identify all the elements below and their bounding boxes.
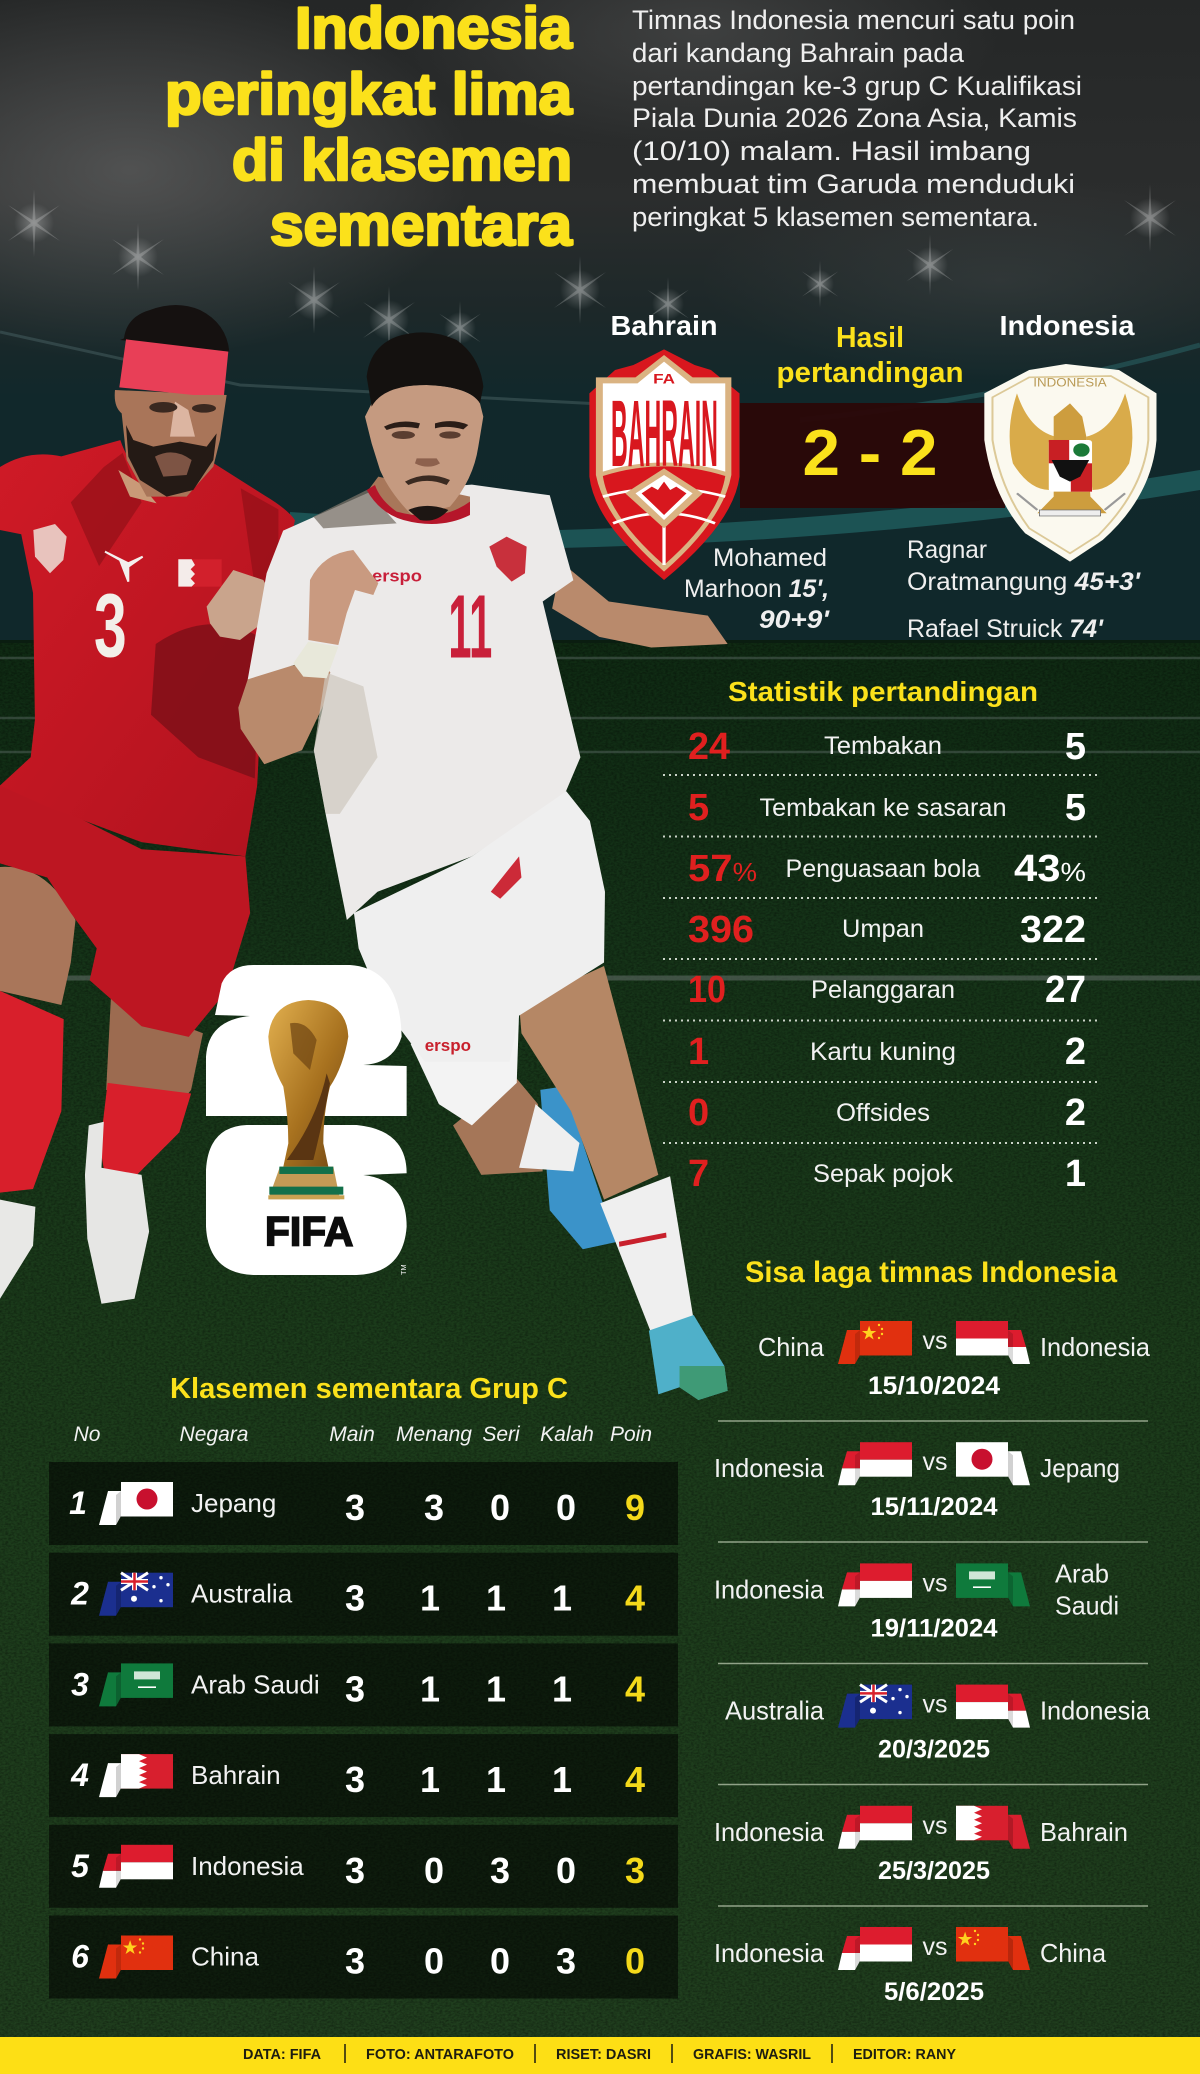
player in white: 11 [448,577,492,677]
match: Australia vs Indonesia: 20/3/2025 [878,1736,990,1764]
scorers: Bahrain: Marhoon 15', [684,575,829,603]
stat row: corners: 1 [1065,1153,1086,1195]
table header [74,1423,652,1446]
player in white: erspo [372,567,422,586]
row 3: Arab Saudi: 1 [486,1668,506,1709]
heading: match result: Hasil [836,322,904,354]
row 4: Bahrain: 1 [552,1759,572,1800]
footer credits bar: DATA: FIFA [243,2046,321,2063]
intro text block [632,5,1082,232]
match: Indonesia vs Bahrain: Bahrain [1040,1817,1128,1847]
match: China vs Indonesia: vs [922,1327,948,1355]
team name: Bahrain: Bahrain [610,310,718,341]
match result panel [589,310,1156,643]
footer credits bar: EDITOR: RANY [853,2046,956,2063]
row 6: China: 0 [424,1940,444,1982]
stat row: shots: Tembakan [824,732,942,760]
stat row: shots: 24 [688,726,730,768]
heading: standings: Klasemen sementara Grup C [170,1373,568,1405]
crest: Bahrain FA [589,349,740,580]
row 3: Arab Saudi: 3 [345,1668,365,1709]
footer credits bar: FOTO: ANTARAFOTO [366,2046,514,2063]
row 1: Jepang: 0 [556,1487,576,1528]
match: Indonesia vs Bahrain: vs [922,1812,948,1840]
row 3: Arab Saudi: Arab Saudi [191,1669,320,1699]
title [165,0,573,258]
match: Indonesia vs Jepang: Jepang [1040,1453,1120,1483]
match: Australia vs Indonesia: vs [922,1691,948,1719]
stat row: yellow cards: 1 [688,1031,709,1073]
row 4: Bahrain [49,1734,678,1817]
row 4: Bahrain: 3 [345,1759,365,1800]
intro text block: (10/10) malam. Hasil imbang [632,136,1031,166]
scorers: Indonesia: Rafael Struick 74' [907,615,1104,643]
scorers: Indonesia: Ragnar [907,536,987,564]
heading: remaining matches: Sisa laga timnas Indonesia [745,1256,1117,1289]
row 4: Bahrain: 4 [625,1759,645,1800]
row 4: Bahrain: Bahrain [191,1760,281,1790]
row 5: Indonesia: 3 [490,1850,510,1891]
row 1: Jepang: 9 [625,1487,645,1528]
row 2: Australia: 1 [552,1578,572,1619]
table header: No [74,1423,101,1446]
row 6: China: 3 [345,1940,365,1982]
scorers: Indonesia [907,536,1141,643]
table header: Poin [610,1423,652,1446]
row 1: Jepang: 3 [424,1487,444,1528]
row 4: Bahrain: 4 [70,1757,89,1793]
match: Indonesia vs Jepang: Indonesia [714,1453,825,1483]
stat row: passes: 396 [688,909,754,951]
row 2: Australia: Australia [191,1579,293,1609]
stat row: shots [688,726,1086,768]
row 6: China: 6 [71,1938,89,1974]
match: Indonesia vs Arab Saudi: vs [922,1569,948,1597]
stat row: yellow cards: 2 [1065,1031,1086,1073]
match: Indonesia vs Bahrain: 25/3/2025 [878,1857,990,1885]
table header: Menang [396,1423,472,1446]
stat row: offsides: Offsides [836,1099,930,1127]
intro text block: peringkat 5 klasemen sementara. [632,202,1039,232]
table header: Kalah [540,1423,594,1446]
stat row: fouls: Pelanggaran [811,976,955,1004]
match: Indonesia vs Bahrain [714,1806,1128,1885]
row 6: China: 3 [556,1940,576,1982]
row 1: Jepang: 1 [69,1485,87,1521]
stat row: corners: 7 [688,1153,709,1195]
row 1: Jepang: 3 [345,1487,365,1528]
row 2: Australia: 3 [345,1578,365,1619]
match: Australia vs Indonesia: Australia [725,1696,825,1726]
table header: Negara [180,1423,248,1446]
row 3: Arab Saudi [49,1643,678,1726]
row 5: Indonesia: 0 [424,1850,444,1891]
match: Indonesia vs China: 5/6/2025 [884,1978,984,2006]
match: Australia vs Indonesia: Indonesia [1040,1696,1151,1726]
stat row: passes [688,909,1086,951]
scorers: Bahrain: Mohamed [713,544,827,572]
row 5: Indonesia: 5 [71,1848,90,1884]
player in red: 3 [94,577,127,677]
match: China vs Indonesia: 15/10/2024 [868,1372,1000,1400]
row 6: China: China [191,1942,259,1972]
row 3: Arab Saudi: 1 [420,1668,440,1709]
panel: remaining Indonesia matches [714,1256,1151,2006]
stat row: fouls [688,969,1086,1011]
player in red [0,305,295,1304]
row 5: Indonesia [49,1825,678,1908]
row 6: China: 0 [490,1940,510,1982]
footer credits bar: RISET: DASRI [556,2046,651,2063]
match: Indonesia vs China [714,1927,1107,2006]
stat row: possession [688,848,1086,890]
row 1: Jepang [49,1462,678,1545]
row 3: Arab Saudi: 3 [71,1666,89,1702]
title: di klasemen [232,128,572,193]
row 2: Australia: 1 [420,1578,440,1619]
row 1: Jepang: Jepang [191,1488,276,1518]
match: Indonesia vs Arab Saudi [714,1558,1119,1642]
match: Indonesia vs Arab Saudi: Arab [1055,1558,1109,1588]
stat row: passes: Umpan [842,915,924,943]
row 3: Arab Saudi: 4 [625,1668,645,1709]
intro text block: pertandingan ke-3 grup C Kualifikasi [632,71,1082,101]
match: China vs Indonesia [758,1321,1151,1400]
intro text block: membuat tim Garuda menduduki [632,169,1075,199]
stat row: offsides [688,1092,1086,1134]
match: Indonesia vs Jepang: 15/11/2024 [870,1493,998,1521]
row 4: Bahrain: 1 [420,1759,440,1800]
title: sementara [270,193,573,258]
player in white: erspo [425,1037,471,1056]
footer credits bar [0,2037,1200,2074]
row 6: China [49,1916,678,1998]
crest: Indonesia [984,364,1156,562]
row 2: Australia: 4 [625,1578,645,1619]
stat row: shots on target: 5 [688,787,709,829]
crest: Indonesia: INDONESIA [1033,376,1107,389]
photo: two football players [0,305,728,1400]
stat row: shots on target: 5 [1065,787,1086,829]
row 4: Bahrain: 1 [486,1759,506,1800]
row 2: Australia [49,1553,678,1636]
logo: FIFA World Cup 2026: TM [399,1264,408,1275]
row 6: China: 0 [625,1940,645,1982]
row 1: Jepang: 0 [490,1487,510,1528]
row 5: Indonesia: Indonesia [191,1851,304,1881]
match: Indonesia vs China: China [1040,1938,1107,1968]
title: peringkat lima [165,62,573,127]
stat row: possession: 57% [688,848,757,890]
row 5: Indonesia: 3 [345,1850,365,1891]
stat row: corners [688,1153,1086,1195]
match: Indonesia vs Arab Saudi: Indonesia [714,1574,825,1604]
stat row: possession: 43% [1014,848,1086,890]
heading: match result [776,322,964,389]
crest: Bahrain FA: FA [653,372,675,387]
icon: World Cup trophy [268,1000,348,1199]
table header: Seri [482,1423,521,1446]
stat row: corners: Sepak pojok [813,1160,953,1188]
match: Indonesia vs Jepang [714,1442,1120,1521]
match: China vs Indonesia: Indonesia [1040,1332,1151,1362]
heading: match result: pertandingan [776,357,964,389]
row 2: Australia: 1 [486,1578,506,1619]
stat row: possession: Penguasaan bola [786,855,981,883]
player in white [238,332,728,1400]
scorers: Bahrain: 90+9' [759,606,830,634]
score band [740,403,1005,508]
stat row: offsides: 2 [1065,1092,1086,1134]
match: Indonesia vs China: Indonesia [714,1938,825,1968]
match: Indonesia vs Jepang: vs [922,1448,948,1476]
footer credits bar: GRAFIS: WASRIL [693,2046,811,2063]
logo: FIFA World Cup 2026 [206,965,408,1275]
scorers: Bahrain [684,544,830,634]
row 5: Indonesia: 0 [556,1850,576,1891]
panel: group C standings table [49,1373,678,1998]
match: Indonesia vs Bahrain: Indonesia [714,1817,825,1847]
stat row: passes: 322 [1020,909,1086,951]
stat row: fouls: 27 [1045,969,1086,1011]
stat row: shots on target: Tembakan ke sasaran [760,794,1006,822]
intro text block: Timnas Indonesia mencuri satu poin [632,5,1075,35]
match: Indonesia vs China: vs [922,1933,948,1961]
intro text block: dari kandang Bahrain pada [632,38,965,68]
logo: FIFA World Cup 2026: FIFA [265,1208,353,1254]
match result panel: BAHRAIN [611,381,718,487]
stat row: shots: 5 [1065,726,1086,768]
panel: match statistics [663,676,1100,1195]
stat row: fouls: 10 [688,969,726,1011]
team name: Indonesia: Indonesia [1000,310,1135,341]
scorers: Indonesia: Oratmangung 45+3' [907,568,1141,596]
row 3: Arab Saudi: 1 [552,1668,572,1709]
match: Indonesia vs Arab Saudi: 19/11/2024 [870,1614,998,1642]
match: Australia vs Indonesia [725,1685,1151,1764]
stat row: yellow cards [688,1031,1086,1073]
row 2: Australia: 2 [70,1576,89,1612]
heading: statistics: Statistik pertandingan [728,676,1038,707]
stat row: shots on target [688,787,1086,829]
stat row: yellow cards: Kartu kuning [810,1038,956,1066]
intro text block: Piala Dunia 2026 Zona Asia, Kamis [632,103,1077,133]
match: China vs Indonesia: China [758,1332,825,1362]
table header: Main [329,1423,375,1446]
match: Indonesia vs Arab Saudi: Saudi [1055,1590,1119,1620]
row 5: Indonesia: 3 [625,1850,645,1891]
score: 2 - 2 [802,416,938,489]
stat row: offsides: 0 [688,1092,709,1134]
